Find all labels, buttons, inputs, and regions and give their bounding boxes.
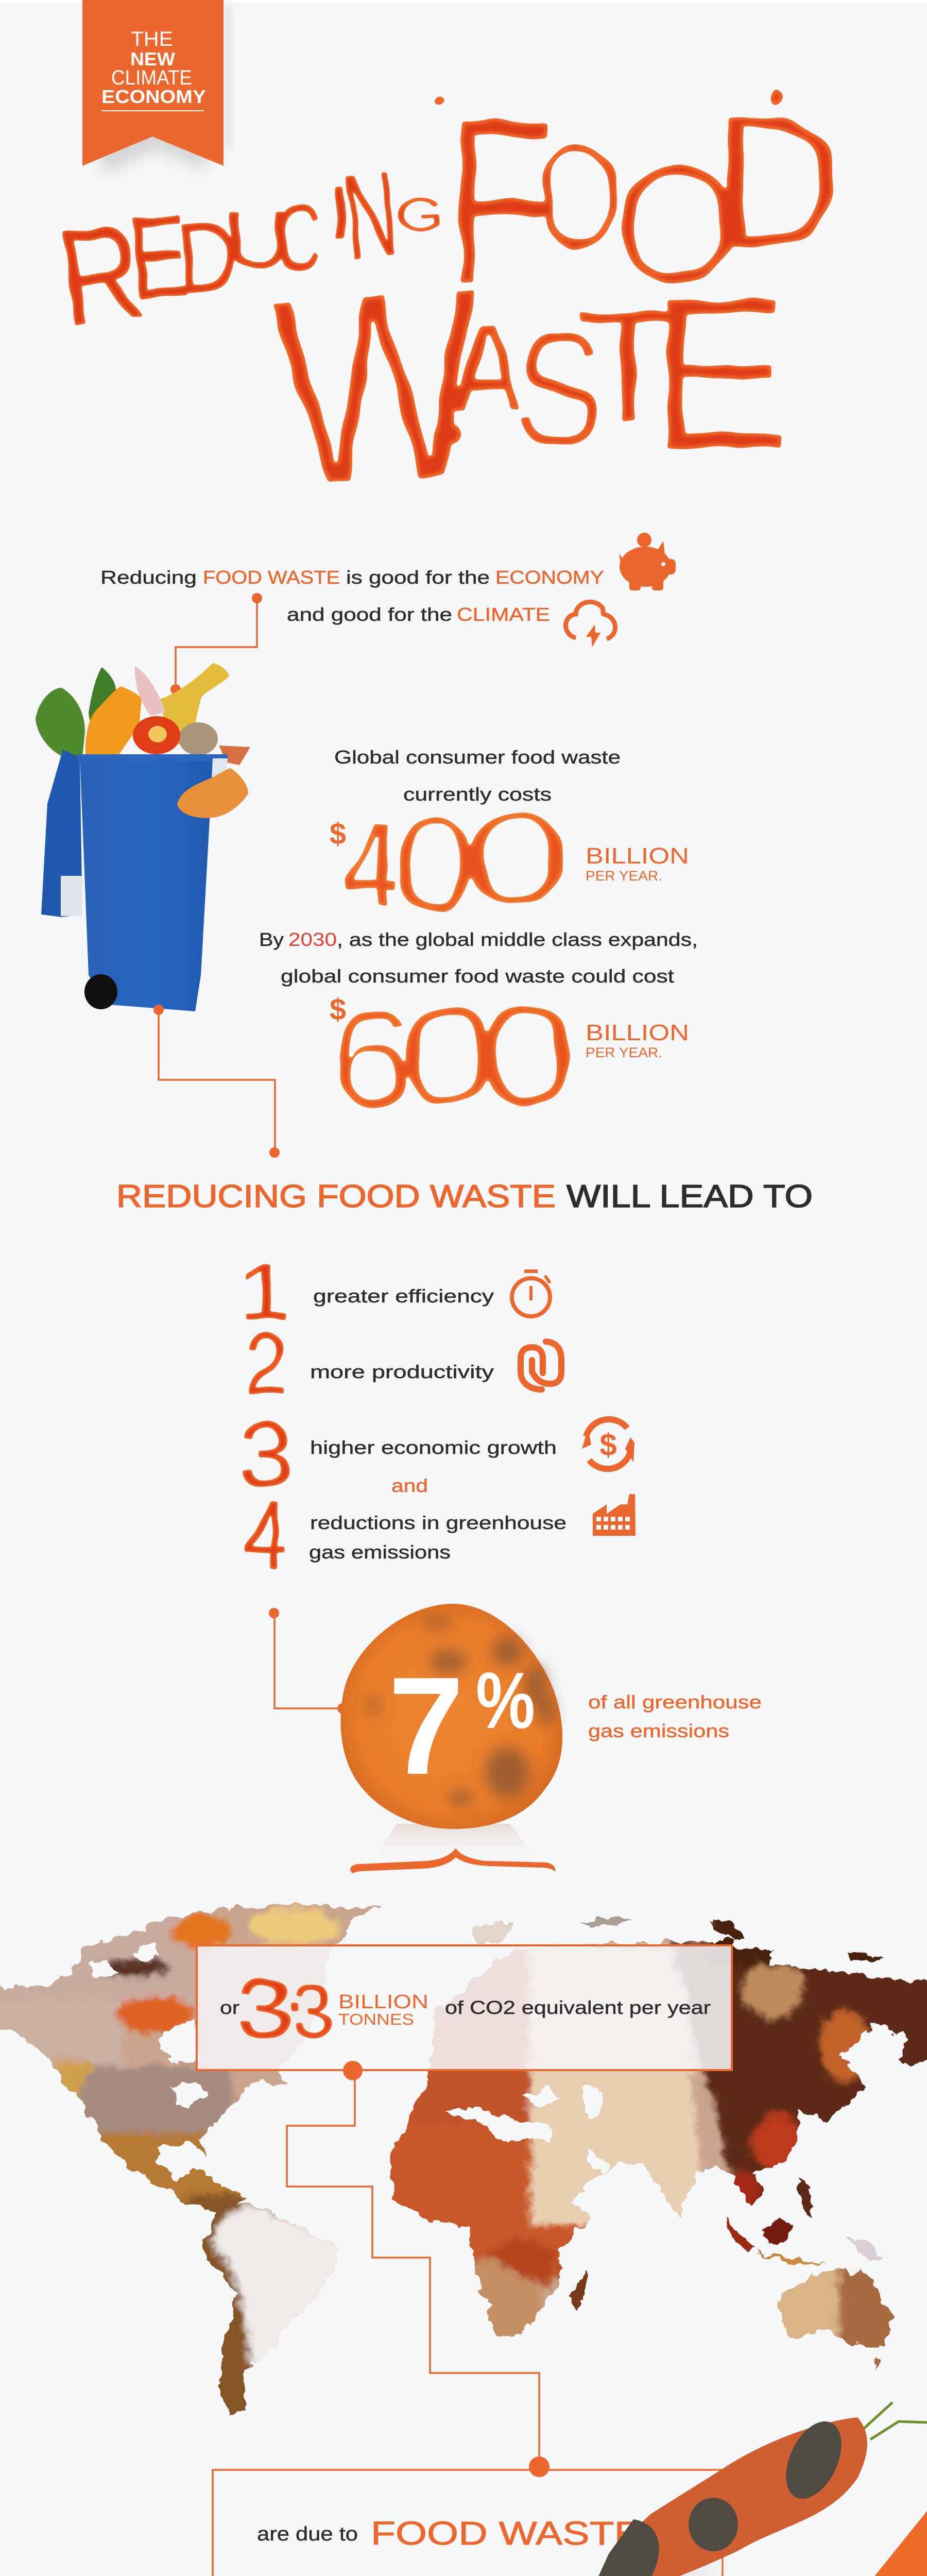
title: food waste in ketchup lettering: O	[535, 113, 624, 280]
text: of all greenhouse gas emissions: gas emissions	[588, 1720, 729, 1741]
intro text: good for economy and climate: Reducing	[100, 567, 197, 588]
title: reducing in ketchup lettering	[49, 146, 444, 356]
callout box: or 3.3 billion tonnes: 3	[292, 1970, 334, 2054]
callout box: are due to food waste: FOOD WASTE	[371, 2515, 641, 2552]
ketchup numerals 1 to 4: 3	[238, 1403, 295, 1506]
icon: stopwatch	[512, 1269, 550, 1316]
title: food waste in ketchup lettering: S	[514, 298, 606, 481]
text: of all greenhouse gas emissions	[588, 1691, 762, 1741]
title: food waste in ketchup lettering: T	[576, 277, 681, 456]
connector: list to orange	[269, 1608, 348, 1714]
callout box: or 3.3 billion tonnes: 3	[235, 1960, 294, 2056]
title: reducing in ketchup lettering: D	[173, 199, 244, 315]
title: food waste in ketchup lettering: W	[263, 229, 497, 546]
title: food waste in ketchup lettering: F	[444, 69, 555, 334]
icon: cloud with lightning	[565, 602, 615, 647]
ribbon: the new climate economy logo	[82, 0, 232, 175]
stat: 400 billion per year	[330, 747, 689, 939]
stat: 600 billion per year by 2030: 0	[476, 975, 578, 1136]
icon: at sign loop	[521, 1342, 561, 1389]
connector: bin to heading	[153, 1005, 280, 1158]
callout box: or 3.3 billion tonnes	[197, 1945, 732, 2070]
callout box: are due to food waste: are due to	[257, 2523, 358, 2545]
icon: dollar with arrows: $	[599, 1428, 617, 1462]
stat: 600 billion per year by 2030: By	[259, 929, 284, 950]
heading: reducing food waste will lead to: REDUCING FOOD WASTE	[116, 1179, 556, 1214]
icon: factory	[593, 1494, 636, 1536]
stat: 400 billion per year: PER YEAR.	[586, 868, 662, 884]
ribbon: the new climate economy logo: CLIMATE	[111, 66, 192, 89]
ketchup numerals 1 to 4: 1	[238, 1248, 291, 1336]
title: food waste in ketchup lettering	[263, 69, 846, 546]
list: four benefits	[238, 1248, 566, 1590]
icon: piggy bank	[619, 533, 676, 590]
ketchup numerals 1 to 4: 2	[244, 1316, 288, 1413]
illustration: rotten orange with 7 percent	[340, 1604, 562, 1865]
stat: 600 billion per year by 2030: , as the global middle class expands,	[337, 929, 698, 950]
eurasia colours	[412, 1906, 927, 2226]
intro text: good for economy and climate: and good for the	[287, 604, 452, 625]
callout box: or 3.3 billion tonnes: of CO2 equivalent per year	[445, 1997, 711, 2018]
list: four benefits: more productivity	[310, 1361, 494, 1382]
illustration: rotten orange with 7 percent: 7	[388, 1649, 464, 1804]
intro text: good for economy and climate: FOOD WASTE	[203, 567, 340, 588]
callout box: or 3.3 billion tonnes: .	[284, 1947, 303, 2028]
list: four benefits: greater efficiency	[313, 1285, 494, 1307]
south america colours	[185, 2195, 350, 2421]
heading: reducing food waste will lead to: WILL LEAD TO	[566, 1179, 813, 1214]
ketchup numerals 1 to 4	[238, 1248, 295, 1590]
stat: 400 billion per year: Global consumer food waste	[334, 747, 621, 768]
heading: reducing food waste will lead to	[116, 1179, 813, 1214]
title: reducing in ketchup lettering: E	[124, 189, 195, 325]
title: food waste in ketchup lettering: A	[450, 297, 526, 440]
list: four benefits: and	[391, 1475, 428, 1496]
intro text: good for economy and climate	[100, 567, 604, 625]
ribbon: the new climate economy logo: THE	[131, 28, 173, 50]
title: food waste in ketchup lettering: E	[649, 252, 793, 496]
title: reducing in ketchup lettering: G	[396, 188, 444, 241]
connector: map box to food waste box	[287, 2061, 550, 2477]
illustration: fresh carrot	[751, 2511, 927, 2576]
intro text: good for economy and climate: ECONOMY	[495, 567, 604, 588]
list: four benefits: reductions in greenhouse	[310, 1512, 566, 1533]
stat: 600 billion per year by 2030: PER YEAR.	[586, 1045, 662, 1060]
curly brace under orange	[350, 1848, 556, 1873]
stat: 400 billion per year: 0	[461, 785, 573, 931]
stat: 600 billion per year by 2030: global consumer food waste could cost	[281, 965, 674, 987]
list: four benefits: gas emissions	[309, 1541, 451, 1563]
illustration: blue bin full of food scraps	[36, 663, 250, 1011]
title: reducing in ketchup lettering: U	[224, 196, 291, 285]
stat: 400 billion per year: BILLION	[586, 843, 689, 869]
callout box: or 3.3 billion tonnes: or	[220, 1997, 239, 2018]
title: reducing in ketchup lettering: R	[49, 194, 152, 356]
stat: 400 billion per year: 4	[343, 797, 399, 934]
callout box: or 3.3 billion tonnes: TONNES	[338, 2010, 414, 2028]
world map made of food scraps	[0, 1896, 927, 2421]
text: of all greenhouse gas emissions: of all greenhouse	[588, 1691, 762, 1713]
stat: 400 billion per year: $	[330, 817, 346, 851]
illustration: rotten orange with 7 percent: %	[476, 1656, 535, 1745]
intro text: good for economy and climate: is good for the	[346, 567, 490, 588]
list: four benefits: higher economic growth	[310, 1437, 557, 1458]
oceania colours	[721, 2215, 901, 2375]
stat: 400 billion per year: 0	[392, 790, 479, 939]
connector: intro to bin	[170, 593, 262, 694]
title: reducing in ketchup lettering: I	[329, 172, 351, 255]
africa colours	[381, 2097, 608, 2344]
sea cut-outs	[88, 1942, 608, 2172]
title: food waste in ketchup lettering: D	[712, 76, 846, 286]
icon: dollar with arrows	[582, 1419, 634, 1469]
ketchup numerals 1 to 4: 4	[245, 1481, 287, 1590]
stat: 600 billion per year by 2030: $	[330, 993, 346, 1026]
title: reducing in ketchup lettering: N	[337, 146, 405, 285]
stat: 600 billion per year by 2030: 0	[397, 977, 499, 1134]
stat: 600 billion per year by 2030: 2030	[288, 929, 337, 950]
callout box: are due to food waste	[213, 2470, 723, 2576]
title: reducing in ketchup lettering: C	[275, 183, 322, 292]
stat: 600 billion per year by 2030: BILLION	[586, 1020, 689, 1045]
callout box: or 3.3 billion tonnes: BILLION	[338, 1991, 428, 2013]
stat: 600 billion per year by 2030: 6	[329, 979, 415, 1137]
title: food waste in ketchup lettering: O	[612, 128, 744, 318]
illustration: rotten carrot	[576, 2402, 927, 2576]
stat: 600 billion per year by 2030	[259, 929, 698, 1137]
ribbon: the new climate economy logo: NEW	[130, 48, 175, 70]
stat: 400 billion per year: currently costs	[403, 784, 552, 805]
north america colours	[0, 1896, 340, 2215]
intro text: good for economy and climate: CLIMATE	[457, 604, 550, 625]
ribbon: the new climate economy logo: ECONOMY	[101, 86, 206, 107]
